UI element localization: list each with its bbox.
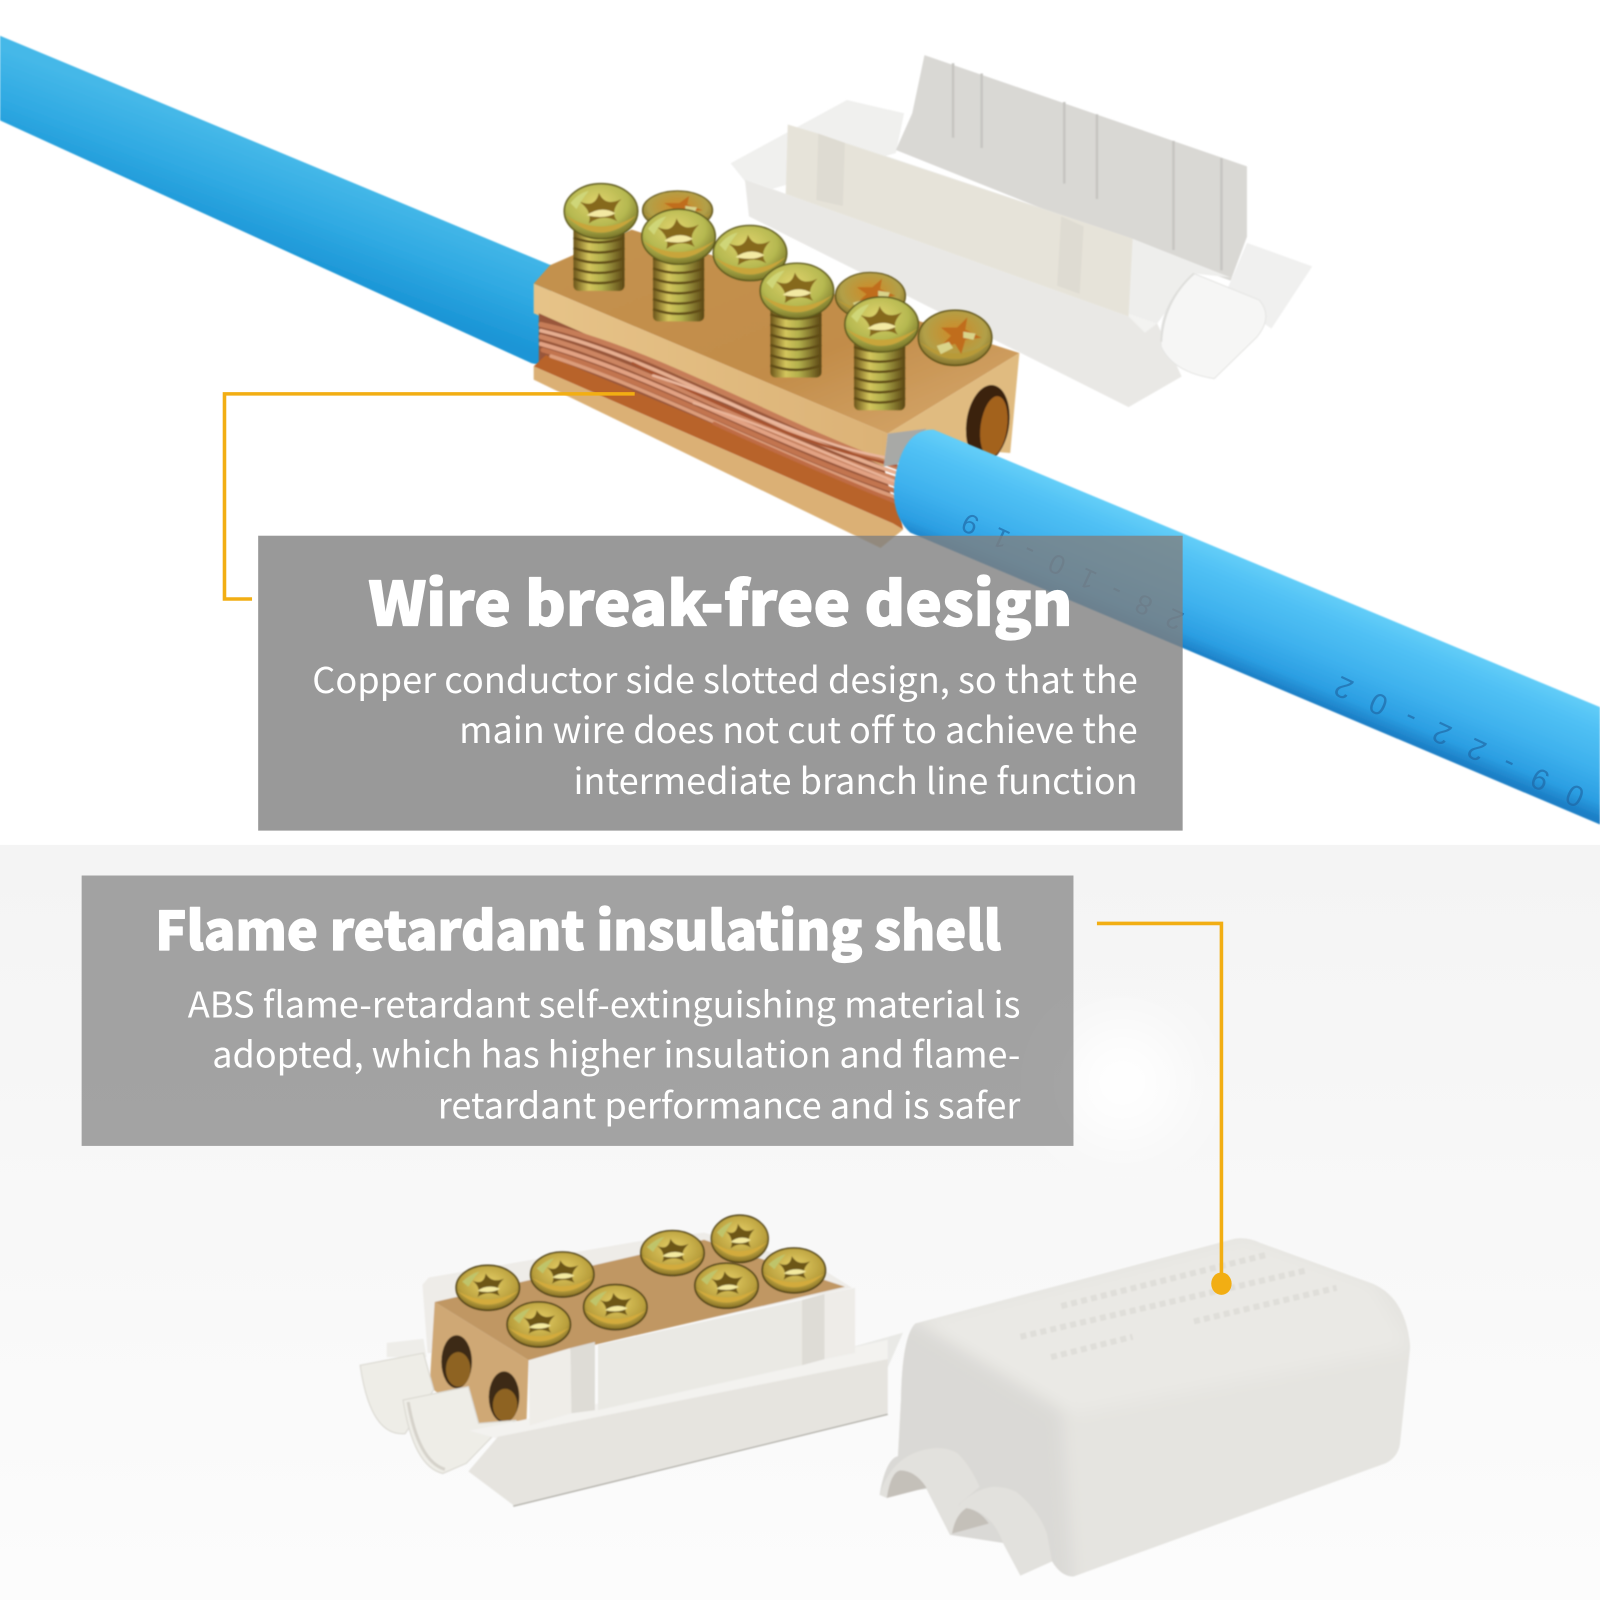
background: white top photo	[0, 0, 1600, 845]
photo: base with brass block and screws	[360, 1233, 903, 1506]
background: lower photo	[0, 845, 1600, 1600]
description: flame retardant insulating shell: ABS flame-retardant self-extinguishing material is	[188, 977, 1020, 1028]
slot interior	[539, 313, 898, 523]
description: flame retardant insulating shell: adopted, which has higher insulation and flame-	[212, 1027, 1020, 1078]
half tube two	[403, 1387, 516, 1473]
heading: wire break-free design: Wire break-free design	[368, 557, 1072, 644]
back wall	[422, 1233, 852, 1357]
shell half-round channel	[1161, 273, 1266, 379]
cable arch one	[880, 1448, 980, 1535]
brass end face	[430, 1302, 529, 1423]
photo: open grey insulating shell	[731, 55, 1312, 407]
lower brass lip	[534, 366, 903, 548]
heading: flame retardant insulating shell: Flame retardant insulating shell	[155, 889, 1001, 966]
description: wire break-free design: Copper conductor side slotted design, so that the	[312, 653, 1138, 704]
photo: blue wire left section	[0, 36, 551, 367]
right flap	[852, 1333, 903, 1367]
copper plate slot floor	[534, 355, 903, 530]
description: flame retardant insulating shell	[188, 977, 1021, 1129]
photo: brass terminal block with copper strands	[534, 230, 1019, 548]
description: wire break-free design: main wire does not cut off to achieve the	[459, 703, 1138, 754]
wire print: upper marking: 28-10-19	[957, 507, 1188, 637]
screws on base	[456, 1215, 826, 1347]
photo: blue wire right section	[894, 430, 1600, 824]
brass end face	[884, 353, 1019, 466]
screws on brass block	[564, 184, 992, 410]
holes	[441, 1335, 519, 1422]
silver wedge	[884, 429, 927, 466]
copper strands	[541, 324, 898, 502]
leader line with dot: lower callout	[1097, 923, 1232, 1295]
description: flame retardant insulating shell: retardant performance and is safer	[438, 1078, 1021, 1129]
wire socket hole	[961, 382, 1014, 465]
embossed text marks on cover	[1020, 1255, 1337, 1357]
front wall tab left	[529, 1348, 571, 1426]
shell floor	[847, 143, 1231, 323]
callout box: wire break-free design	[258, 536, 1183, 831]
rear half tube flap	[387, 1339, 427, 1357]
brass upper front face	[534, 284, 888, 466]
front wall panel	[598, 1300, 802, 1410]
half tube one	[360, 1353, 434, 1434]
brass top face	[534, 230, 1019, 434]
callout box: flame retardant insulating shell	[82, 876, 1073, 1146]
front wall recess	[570, 1342, 595, 1413]
description: wire break-free design	[312, 653, 1138, 805]
base top lip	[469, 1340, 888, 1439]
description: wire break-free design: intermediate branch line function	[573, 754, 1138, 805]
leader line: top callout	[224, 394, 635, 599]
brass top	[435, 1240, 845, 1360]
front long face	[468, 1359, 888, 1505]
photo: closed grey cover	[880, 1238, 1410, 1577]
cover body	[880, 1238, 1410, 1577]
cable arch two	[950, 1487, 1052, 1576]
wire print: lower marking: 09-22-02	[1330, 669, 1589, 814]
